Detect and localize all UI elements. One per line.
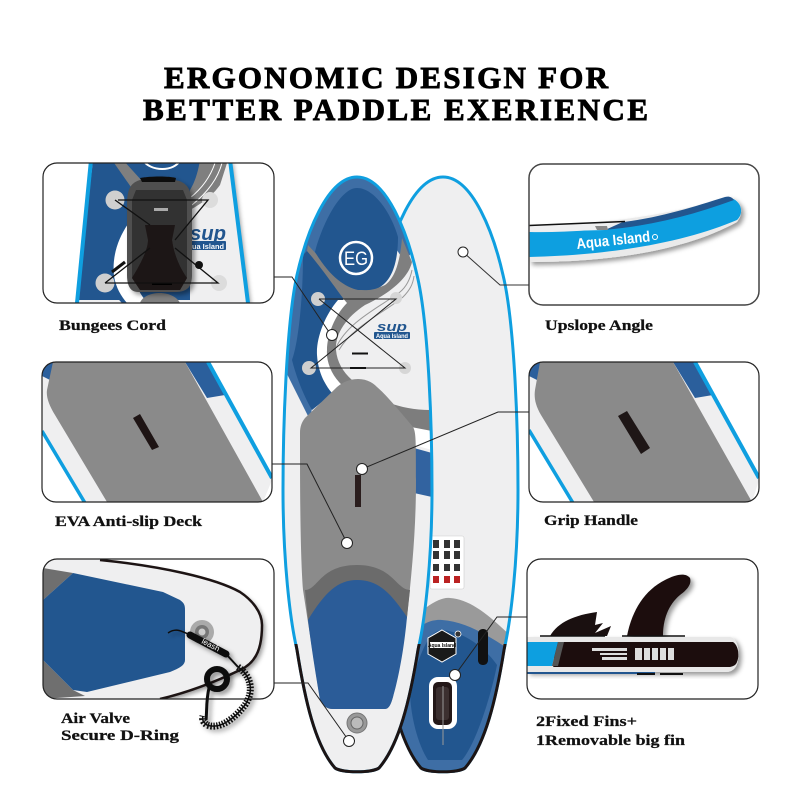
nose panel <box>315 188 398 290</box>
sup logo in panel: ua Island <box>192 242 224 251</box>
coiled leash <box>168 630 250 726</box>
large fin <box>627 575 690 636</box>
coiled leash: leash <box>200 637 221 653</box>
panel: fins <box>527 559 758 699</box>
sup logo: sup <box>377 319 407 334</box>
sup logo in panel <box>192 229 226 250</box>
hexagon brand badge <box>428 630 461 662</box>
nose light band <box>288 178 410 416</box>
title <box>143 60 648 127</box>
label: upslope angle: Upslope Angle <box>545 318 653 334</box>
bungee anchors and cords <box>302 292 411 375</box>
handle <box>618 411 650 454</box>
label: air valve and d-ring: Air Valve <box>61 711 130 727</box>
air valve <box>190 620 214 644</box>
safety sticker <box>430 536 464 589</box>
sup logo in panel: sup <box>190 223 226 245</box>
carry handle <box>355 475 361 507</box>
label: bungees cord: Bungees Cord <box>59 318 167 334</box>
panel: upslope angle <box>529 164 759 305</box>
panel: air valve and leash <box>43 559 274 726</box>
leader line: upslope angle <box>458 247 529 285</box>
panel: grip handle <box>529 362 759 503</box>
label: air valve and d-ring <box>61 711 180 744</box>
sup logo: Aqua Island <box>376 333 408 340</box>
blue swirl <box>292 250 344 410</box>
panel: eva deck <box>42 362 272 503</box>
board side <box>527 637 739 672</box>
title: ERGONOMIC DESIGN FOR <box>164 60 609 95</box>
d-ring anchors <box>96 190 227 292</box>
leader line: fins <box>450 617 527 680</box>
bungee cords <box>105 200 218 283</box>
panel: bungees cord <box>43 160 274 303</box>
white swirl <box>316 300 347 392</box>
air valve <box>347 713 367 733</box>
leader line: bungees cord <box>274 277 338 340</box>
grey swirl <box>307 238 412 385</box>
fin box <box>429 677 457 745</box>
front view of board <box>280 170 432 772</box>
warning icons <box>592 648 674 660</box>
leader line: air valve <box>274 683 354 746</box>
leader line: grip handle <box>356 412 529 474</box>
leader line: eva deck <box>272 464 352 548</box>
brand mark <box>340 242 372 274</box>
aqua island wordmark: Aqua Island <box>576 228 651 253</box>
deck pad <box>300 379 416 709</box>
back view of board <box>400 176 520 774</box>
label: fins: 2Fixed Fins+ <box>536 714 637 730</box>
label: air valve and d-ring: Secure D-Ring <box>61 728 180 744</box>
side fin <box>478 629 488 665</box>
label: fins: 1Removable big fin <box>536 733 686 749</box>
label: fins <box>536 714 686 749</box>
hexagon brand badge: Aqua Island <box>428 643 456 649</box>
backpack <box>127 176 192 292</box>
label: eva deck: EVA Anti-slip Deck <box>55 514 203 530</box>
brand mark: EG <box>344 249 368 270</box>
small fins <box>550 612 611 636</box>
grey tail of swirl at right <box>394 404 430 430</box>
handle <box>133 414 159 450</box>
sup logo <box>374 319 410 340</box>
label: grip handle: Grip Handle <box>544 513 638 529</box>
title: BETTER PADDLE EXERIENCE <box>143 92 648 127</box>
